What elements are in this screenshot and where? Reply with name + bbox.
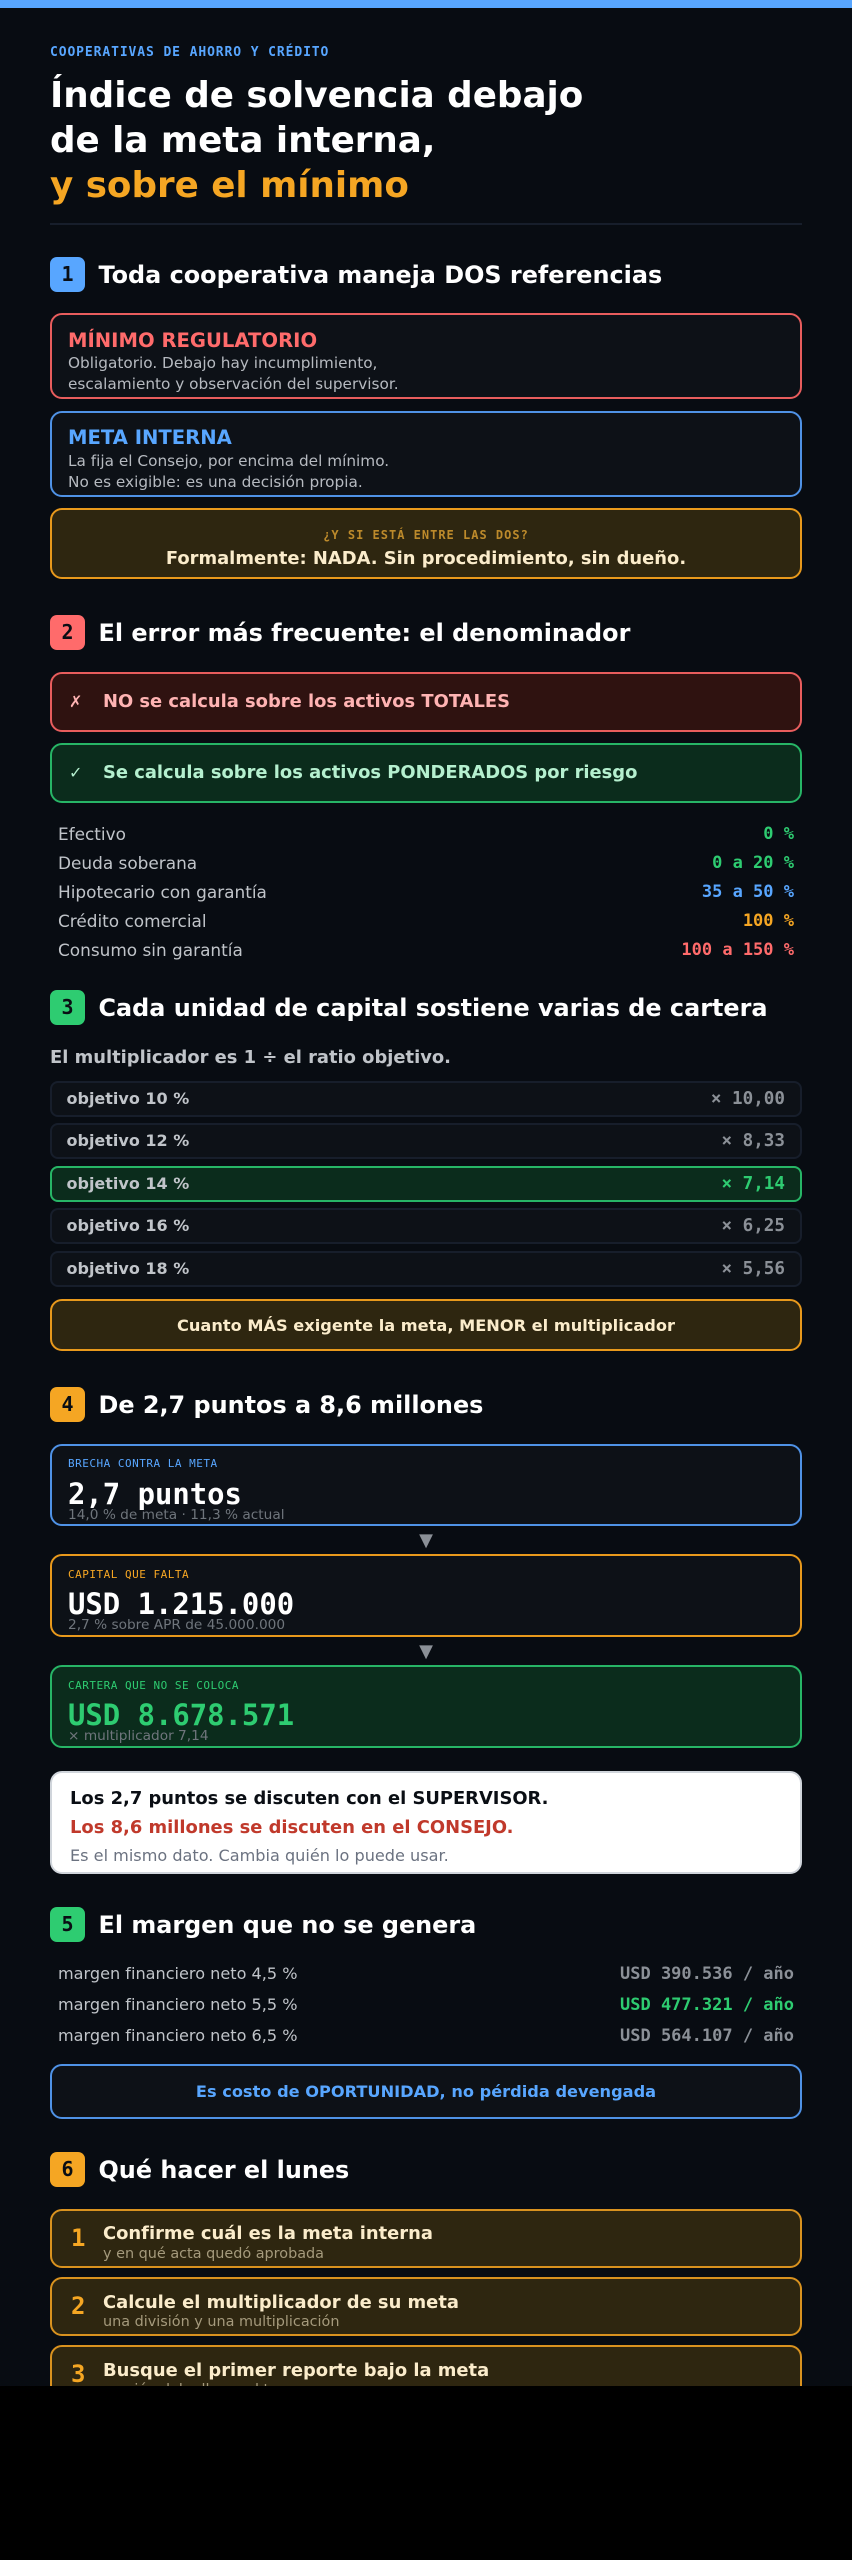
- risk weights table: 0 a 20 %: [712, 853, 794, 873]
- badge 4: 4: [61, 1392, 74, 1416]
- title: Índice de solvencia debajo: [50, 75, 583, 116]
- badge 2: [50, 615, 85, 650]
- title: de la meta interna,: [50, 120, 435, 161]
- callout: activos ponderados: ✓: [69, 763, 82, 782]
- white callout: Es el mismo dato. Cambia quién lo puede usar.: [70, 1846, 449, 1865]
- risk weights table: Deuda soberana: [58, 853, 197, 873]
- badge 5: [50, 1907, 85, 1942]
- top accent bar: [0, 0, 852, 8]
- multiplier list: [50, 1081, 802, 1287]
- panel: meta interna: La fija el Consejo, por encima del mínimo.: [68, 452, 389, 470]
- badge 3: 3: [61, 995, 74, 1019]
- callout: multiplicador: Cuanto MÁS exigente la meta, MENOR el multiplicador: [177, 1316, 675, 1335]
- risk weights table: 0 %: [763, 824, 794, 844]
- action step 2: una división y una multiplicación: [103, 2314, 339, 2330]
- eyebrow: COOPERATIVAS DE AHORRO Y CRÉDITO: [50, 45, 329, 60]
- multiplier list: × 5,56: [721, 1259, 785, 1279]
- arrow: ▼: [419, 1641, 433, 1662]
- step card: brecha: 14,0 % de meta · 11,3 % actual: [68, 1507, 285, 1523]
- step card: cartera: × multiplicador 7,14: [68, 1728, 209, 1744]
- white callout: Los 2,7 puntos se discuten con el SUPERVISOR.: [70, 1788, 548, 1809]
- callout: activos ponderados: Se calcula sobre los activos PONDERADOS por riesgo: [103, 762, 637, 783]
- action step 2: [50, 2277, 802, 2336]
- callout: costo de oportunidad: Es costo de OPORTUNIDAD, no pérdida devengada: [196, 2082, 656, 2101]
- margin table: margen financiero neto 6,5 %: [58, 2026, 298, 2045]
- multiplier list: objetivo 16 %: [66, 1216, 189, 1235]
- step card: capital: CAPITAL QUE FALTA: [68, 1568, 189, 1581]
- action step 1: [50, 2209, 802, 2268]
- action step 1: Confirme cuál es la meta interna: [103, 2223, 433, 2244]
- panel: meta interna: [50, 411, 802, 497]
- panel: mínimo regulatorio: [50, 313, 802, 399]
- callout: activos totales: ✗: [69, 692, 82, 711]
- multiplier list: × 6,25: [721, 1216, 785, 1236]
- section 3 heading: Cada unidad de capital sostiene varias de cartera: [98, 994, 768, 1022]
- step card: capital: [50, 1554, 802, 1637]
- section 2 heading: El error más frecuente: el denominador: [98, 619, 630, 647]
- risk weights table: Crédito comercial: [58, 911, 207, 931]
- panel: meta interna: No es exigible: es una decisión propia.: [68, 473, 363, 491]
- action step 2: Calcule el multiplicador de su meta: [103, 2292, 459, 2313]
- risk weights table: 100 a 150 %: [681, 940, 794, 960]
- action step 3: Busque el primer reporte bajo la meta: [103, 2360, 489, 2381]
- action step 3: [50, 2345, 802, 2404]
- panel: mínimo regulatorio: MÍNIMO REGULATORIO: [68, 329, 317, 352]
- badge 1: [50, 257, 85, 292]
- badge 1: 1: [61, 262, 74, 286]
- badge 2: 2: [61, 620, 74, 644]
- badge 3: [50, 990, 85, 1025]
- white callout: [50, 1771, 802, 1874]
- callout: activos ponderados: [50, 743, 802, 803]
- risk weights table: Efectivo: [58, 824, 126, 844]
- multiplier list: objetivo 12 %: [66, 1131, 189, 1150]
- margin table: USD 390.536 / año: [620, 1964, 794, 1984]
- section 6 heading: Qué hacer el lunes: [98, 2156, 349, 2184]
- action step 2: 2: [71, 2292, 85, 2320]
- badge 4: [50, 1387, 85, 1422]
- callout: multiplicador: [50, 1299, 802, 1351]
- multiplier formula text: El multiplicador es 1 ÷ el ratio objetivo.: [50, 1047, 451, 1068]
- callout: activos totales: NO se calcula sobre los activos TOTALES: [103, 691, 510, 712]
- section 6 heading: [50, 2152, 349, 2187]
- step card: capital: USD 1.215.000: [68, 1587, 294, 1621]
- section 5 heading: El margen que no se genera: [98, 1911, 476, 1939]
- step card: cartera: [50, 1665, 802, 1748]
- title: [50, 74, 583, 206]
- multiplier list: objetivo 10 %: [66, 1089, 189, 1108]
- multiplier list: objetivo 14 %: [66, 1174, 189, 1193]
- step card: capital: 2,7 % sobre APR de 45.000.000: [68, 1617, 285, 1633]
- multiplier list: × 10,00: [711, 1089, 785, 1109]
- panel: entre las dos: Formalmente: NADA. Sin procedimiento, sin dueño.: [166, 548, 686, 569]
- action step 1: 1: [71, 2224, 85, 2252]
- risk weights table: 35 a 50 %: [702, 882, 794, 902]
- arrow: ▼: [419, 1530, 433, 1551]
- title: y sobre el mínimo: [50, 165, 409, 206]
- risk weights table: Hipotecario con garantía: [58, 882, 267, 902]
- badge 5: 5: [61, 1912, 74, 1936]
- white callout: Los 8,6 millones se discuten en el CONSEJO.: [70, 1817, 513, 1838]
- multiplier list: × 7,14: [721, 1174, 785, 1194]
- margin table: margen financiero neto 5,5 %: [58, 1995, 298, 2014]
- multiplier list: × 8,33: [721, 1131, 785, 1151]
- callout: activos totales: [50, 672, 802, 732]
- multiplier list: objetivo 18 %: [66, 1259, 189, 1278]
- panel: entre las dos: ¿Y SI ESTÁ ENTRE LAS DOS?: [323, 528, 529, 542]
- step card: cartera: USD 8.678.571: [68, 1698, 294, 1732]
- step card: brecha: 2,7 puntos: [68, 1477, 242, 1511]
- margin table: USD 564.107 / año: [620, 2026, 794, 2046]
- callout: costo de oportunidad: [50, 2064, 802, 2119]
- margin table: margen financiero neto 4,5 %: [58, 1964, 298, 1983]
- action step 1: y en qué acta quedó aprobada: [103, 2246, 324, 2262]
- panel: entre las dos: [50, 508, 802, 579]
- risk weights table: 100 %: [743, 911, 794, 931]
- margin table: [58, 1964, 794, 2046]
- panel: mínimo regulatorio: escalamiento y observación del supervisor.: [68, 375, 399, 393]
- step card: cartera: CARTERA QUE NO SE COLOCA: [68, 1679, 239, 1692]
- panel: meta interna: META INTERNA: [68, 426, 232, 449]
- risk weights table: Consumo sin garantía: [58, 940, 243, 960]
- risk weights table: [58, 824, 794, 960]
- margin table: USD 477.321 / año: [620, 1995, 794, 2015]
- section 1 heading: Toda cooperativa maneja DOS referencias: [98, 261, 662, 289]
- section 4 heading: De 2,7 puntos a 8,6 millones: [98, 1391, 483, 1419]
- step card: brecha: BRECHA CONTRA LA META: [68, 1457, 218, 1470]
- badge 6: [50, 2152, 85, 2187]
- step card: brecha: [50, 1444, 802, 1526]
- badge 6: 6: [61, 2157, 74, 2181]
- panel: mínimo regulatorio: Obligatorio. Debajo hay incumplimiento,: [68, 354, 377, 372]
